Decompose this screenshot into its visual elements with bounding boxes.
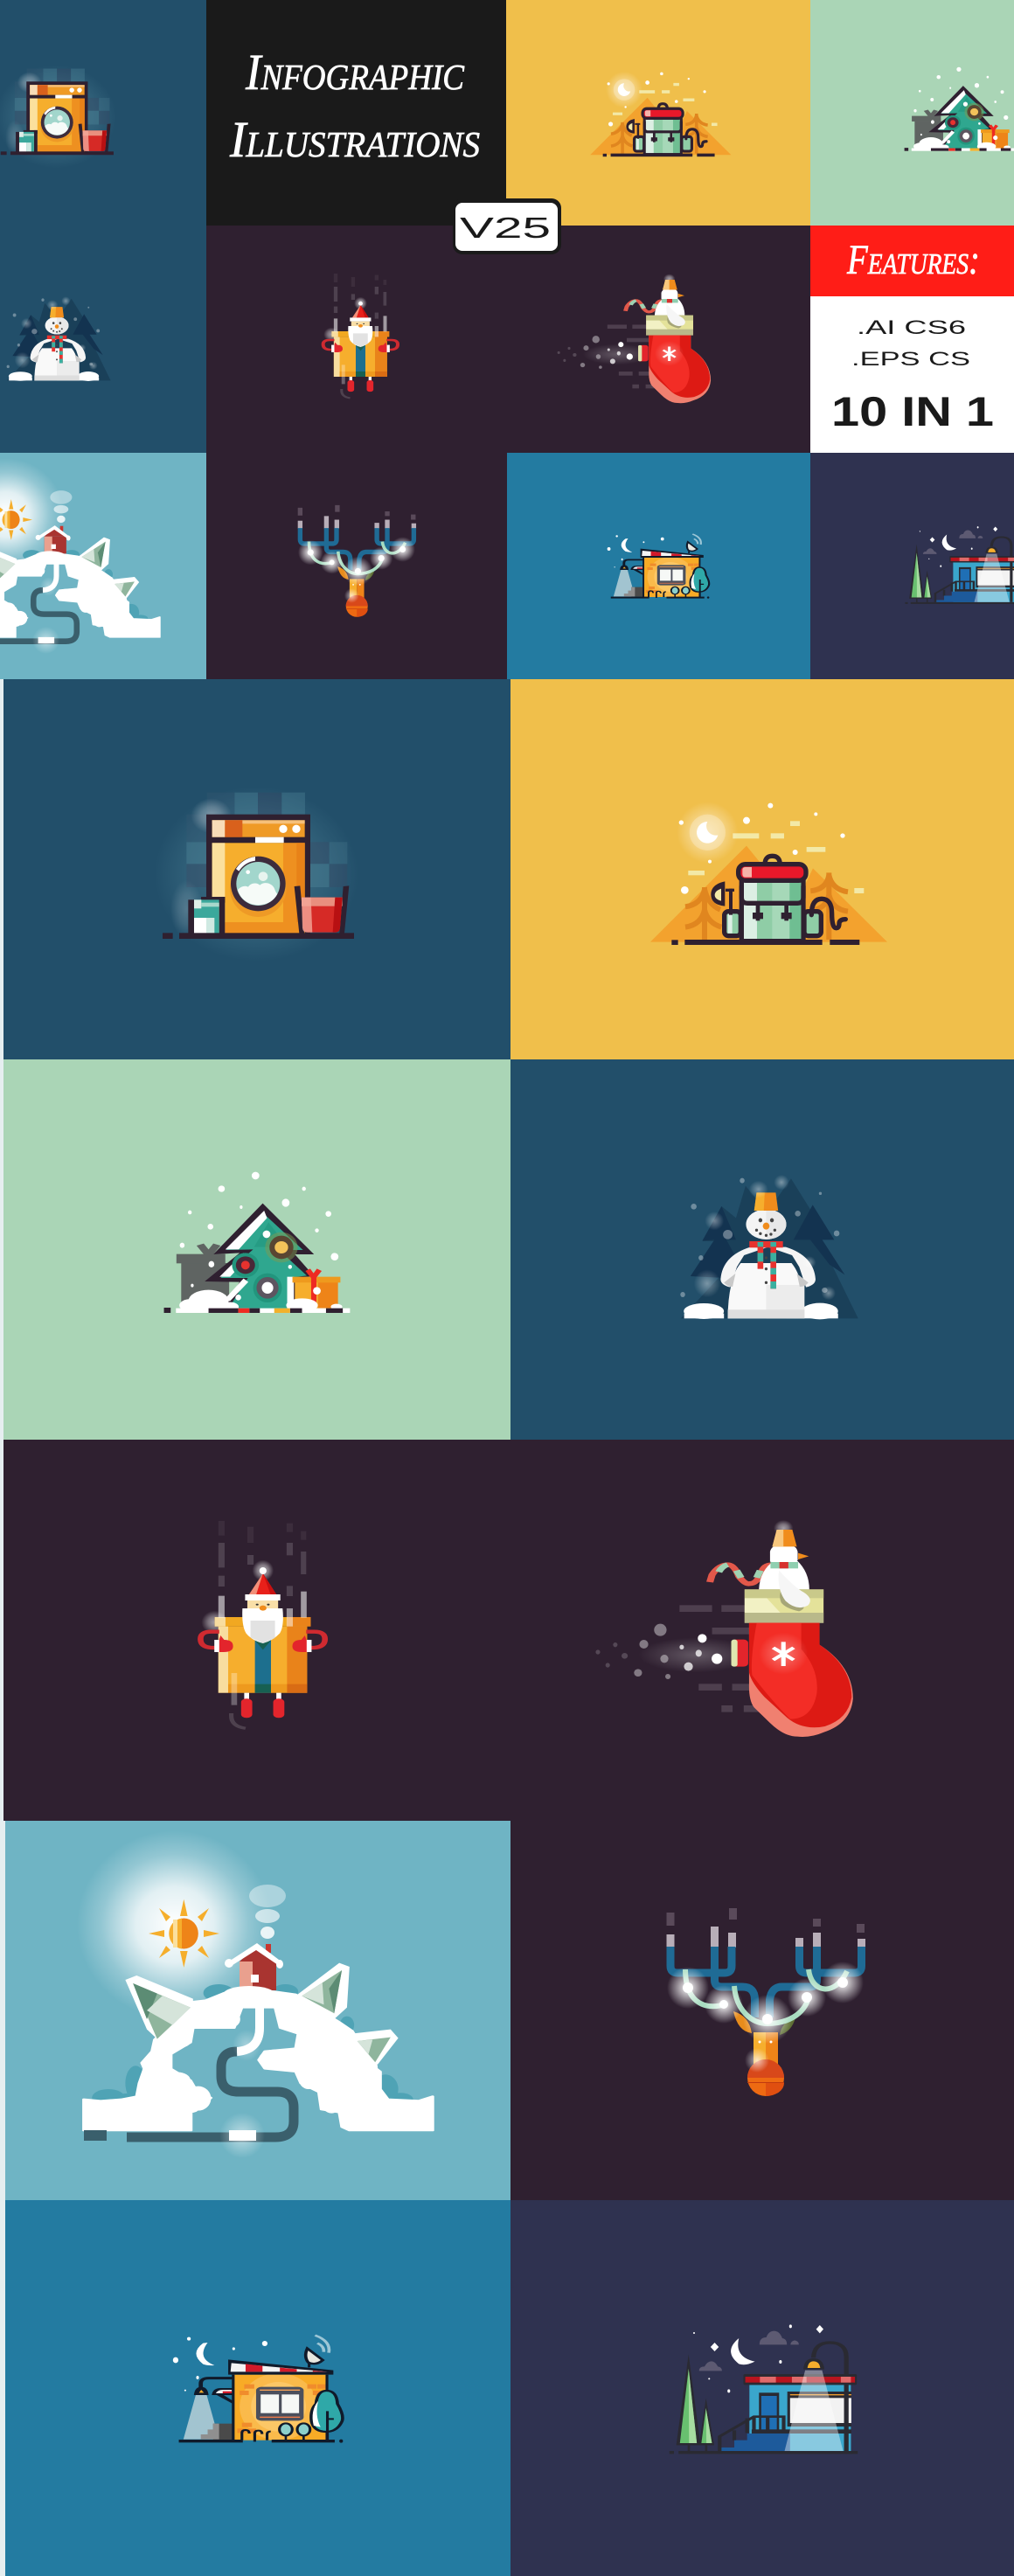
panel: stocking: [510, 1440, 1014, 1821]
illustration: snowman: [680, 1175, 858, 1319]
panel: small christmas tree: [810, 0, 1014, 226]
panel: small orange house: [507, 453, 810, 679]
panel: snowman: [510, 1059, 1014, 1440]
panel: antlers: [510, 1821, 1014, 2200]
panel: small snowy hill: [0, 453, 206, 679]
panel: small blue house: [810, 453, 1014, 679]
panel: santa: [3, 1440, 510, 1821]
illustration: blue house with street lamp: [670, 2324, 858, 2454]
title text: [229, 44, 480, 168]
illustration: christmas tree: [164, 1172, 350, 1313]
illustration: santa gift box: [200, 1521, 325, 1728]
illustration: red stocking with snowman: [595, 1520, 853, 1737]
panel: christmas tree: [3, 1059, 510, 1440]
illustration: glowing reindeer antlers: [666, 1908, 865, 2096]
illustration: orange house at night: [173, 2336, 343, 2443]
panel: washing machine: [3, 679, 510, 1059]
version badge: V25: [460, 212, 551, 244]
panel: title background: [206, 0, 506, 226]
features panel: Features:: [846, 237, 980, 283]
panel: blue house: [510, 2200, 1014, 2576]
title text: Infographic: [245, 44, 465, 101]
panel: small santa and antlers background: [206, 226, 810, 679]
panel: backpack: [510, 679, 1014, 1059]
features panel: 10 IN 1: [831, 388, 994, 434]
version badge: [453, 198, 561, 254]
features panel: .EPS CS: [851, 348, 970, 370]
title text: Illustrations: [229, 111, 480, 168]
panel: small washing machine: [0, 0, 206, 454]
panel: small backpack: [506, 0, 810, 226]
panel: orange house: [5, 2200, 510, 2576]
features panel: .AI CS6: [857, 316, 966, 338]
illustration: snowy hill with sun and house: [77, 1830, 433, 2158]
illustration: backpack: [650, 802, 887, 945]
features panel: [810, 226, 1014, 453]
illustration: washing machine: [155, 787, 358, 962]
panel: snowy hill: [5, 1821, 510, 2200]
